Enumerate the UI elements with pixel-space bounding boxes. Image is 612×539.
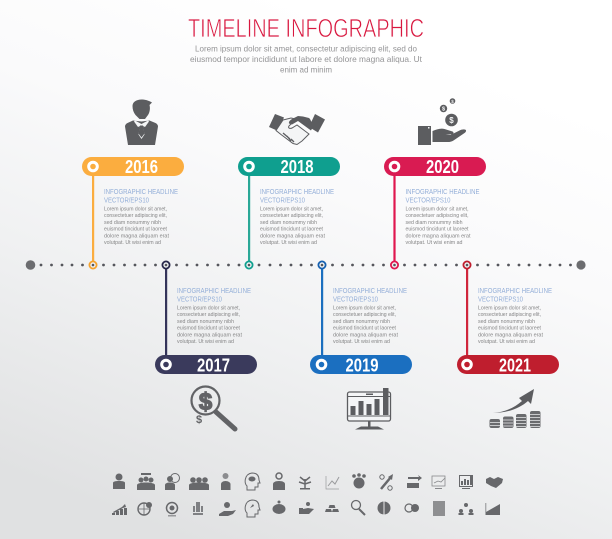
small icon: money plant — [299, 477, 311, 490]
icon: magnifier with dollar: $ — [199, 388, 213, 416]
small icon: person with dollar — [113, 474, 125, 489]
text block 2016: Lorem ipsum dolor sit amet, — [104, 206, 167, 212]
small icon: globe — [138, 502, 152, 515]
subtitle text: Lorem ipsum dolor sit amet, consectetur adipiscing elit, sed do — [195, 44, 417, 54]
small icon: currency globe — [378, 501, 390, 515]
text block 2020: VECTOR/EPS10 — [406, 196, 450, 204]
text block 2018: INFOGRAPHIC HEADLINE — [260, 187, 334, 196]
subtitle text: eiusmod tempor incididunt ut labore et dolore magna aliqua. Ut — [190, 54, 423, 64]
small icon: growth chart — [112, 504, 127, 515]
text block 2016 — [104, 187, 178, 246]
icon: hand with coins — [418, 98, 466, 145]
text block 2020: INFOGRAPHIC HEADLINE — [406, 187, 480, 196]
text block 2018: euismod tincidunt ut laoreet — [260, 226, 323, 232]
text block 2021: VECTOR/EPS10 — [478, 294, 523, 304]
text block 2020: Lorem ipsum dolor sit amet, — [406, 206, 469, 212]
subtitle text — [190, 44, 423, 74]
small icon row 2 — [112, 500, 500, 517]
small icon: monitor line chart — [432, 476, 445, 489]
small icon: head outline — [245, 500, 260, 517]
subtitle text: enim ad minim — [280, 64, 332, 74]
text block 2017: consectetuer adipiscing elit, — [177, 312, 240, 318]
icon: handshake — [269, 114, 325, 144]
year 2019: 2019 — [346, 356, 378, 376]
text block 2019: dolore magna aliquam erat — [333, 332, 398, 338]
text block 2017: volutpat. Ut wisi enim ad — [177, 339, 234, 345]
small icon: scatter chart — [326, 476, 339, 489]
text block 2019: VECTOR/EPS10 — [333, 294, 378, 304]
year 2018: 2018 — [280, 157, 314, 177]
small icon: group — [189, 477, 209, 490]
small icon: hand with money bag — [219, 502, 236, 516]
small icon: hand with coins small — [299, 502, 314, 514]
text block 2020: sed diam nonummy nibh — [406, 220, 462, 226]
text block 2018: volutpat. Ut wisi enim ad — [260, 240, 317, 246]
milestone 2020 — [384, 157, 486, 269]
small icon: person with clock — [165, 474, 180, 490]
text block 2018: dolore magna aliquam erat — [260, 234, 325, 240]
text block 2019: Lorem ipsum dolor sit amet, — [333, 306, 396, 312]
small icon: org chart — [458, 503, 474, 515]
text block 2016: dolore magna aliquam erat — [104, 234, 169, 240]
icon: computer monitor with bars — [348, 388, 390, 430]
year 2017: 2017 — [197, 356, 230, 376]
text block 2016: VECTOR/EPS10 — [104, 196, 149, 204]
milestone 2016 — [82, 157, 184, 269]
text block 2020: volutpat. Ut wisi enim ad — [406, 240, 462, 246]
small icon: piggy bank — [272, 500, 286, 514]
text block 2018: Lorem ipsum dolor sit amet, — [260, 206, 323, 212]
text block 2018 — [260, 187, 334, 246]
small icon row 1 — [113, 473, 503, 490]
small icon: person with gear — [273, 473, 285, 490]
milestone 2021 — [457, 261, 559, 376]
text block 2017: INFOGRAPHIC HEADLINE — [177, 286, 251, 295]
small icon: gold bars — [325, 505, 339, 512]
small icon: globe team — [352, 473, 366, 488]
year 2020: 2020 — [426, 157, 459, 177]
text block 2021: volutpat. Ut wisi enim ad — [478, 339, 535, 345]
small icon: monitor bars — [460, 475, 472, 489]
milestone 2019 — [310, 261, 412, 376]
icon: magnifier with dollar: $ — [196, 414, 202, 426]
milestone 2017 — [155, 261, 257, 376]
year 2016: 2016 — [125, 157, 158, 177]
text block 2016: euismod tincidunt ut laoreet — [104, 226, 167, 232]
text block 2019: euismod tincidunt ut laoreet — [333, 326, 396, 332]
text block 2017 — [177, 286, 251, 345]
small icon: person with bulb — [221, 473, 230, 490]
text block 2019 — [333, 286, 407, 345]
text block 2021: euismod tincidunt ut laoreet — [478, 326, 541, 332]
small icon: bars rising — [486, 503, 500, 515]
icon: magnifier with dollar — [192, 386, 235, 429]
icon: hand with coins: $ — [451, 99, 454, 104]
text block 2019: volutpat. Ut wisi enim ad — [333, 339, 390, 345]
small icon: percent arrow — [380, 474, 393, 490]
small icon: handshake — [486, 477, 503, 488]
small icon: magnifier coins — [352, 500, 365, 515]
text block 2018: sed diam nonummy nibh — [260, 220, 317, 226]
small icon: dollar cycle — [166, 502, 178, 516]
small icon: team — [137, 473, 155, 490]
text block 2018: VECTOR/EPS10 — [260, 196, 305, 204]
text block 2021: consectetuer adipiscing elit, — [478, 312, 541, 318]
text block 2021: dolore magna aliquam erat — [478, 332, 543, 338]
text block 2021: INFOGRAPHIC HEADLINE — [478, 286, 552, 295]
text block 2016: consectetuer adipiscing elit, — [104, 213, 167, 219]
text block 2019: consectetuer adipiscing elit, — [333, 312, 396, 318]
icon: hand with coins: $ — [449, 116, 454, 125]
text block 2019: sed diam nonummy nibh — [333, 319, 390, 325]
small icon: head with cog — [245, 473, 260, 490]
timeline axis — [26, 260, 586, 270]
text block 2020: consectetuer adipiscing elit, — [406, 213, 469, 219]
small icon: money arrow — [407, 475, 422, 488]
small icon: currency exchange — [405, 504, 419, 512]
text block 2016: sed diam nonummy nibh — [104, 220, 161, 226]
text block 2021: Lorem ipsum dolor sit amet, — [478, 306, 541, 312]
icon: businessman — [125, 100, 158, 145]
text block 2017: VECTOR/EPS10 — [177, 294, 222, 304]
title: TIMELINE INFOGRAPHIC — [188, 13, 424, 43]
text block 2017: dolore magna aliquam erat — [177, 332, 242, 338]
small icon: document chart — [433, 501, 445, 516]
text block 2018: consectetuer adipiscing elit, — [260, 213, 323, 219]
year 2021: 2021 — [499, 356, 531, 376]
text block 2017: Lorem ipsum dolor sit amet, — [177, 306, 240, 312]
text block 2019: INFOGRAPHIC HEADLINE — [333, 286, 407, 295]
milestone 2018 — [238, 157, 340, 269]
icon: coins and rising arrow — [490, 389, 540, 428]
text block 2020: dolore magna aliquam erat — [406, 234, 471, 240]
text block 2017: euismod tincidunt ut laoreet — [177, 326, 240, 332]
text block 2020 — [406, 187, 480, 246]
text block 2020: euismod tincidunt ut laoreet — [406, 226, 469, 232]
text block 2016: INFOGRAPHIC HEADLINE — [104, 187, 178, 196]
small icon: tower chart — [193, 502, 203, 515]
text block 2017: sed diam nonummy nibh — [177, 319, 234, 325]
icon: hand with coins: $ — [442, 106, 445, 112]
text block 2021: sed diam nonummy nibh — [478, 319, 535, 325]
text block 2016: volutpat. Ut wisi enim ad — [104, 240, 161, 246]
text block 2021 — [478, 286, 552, 345]
